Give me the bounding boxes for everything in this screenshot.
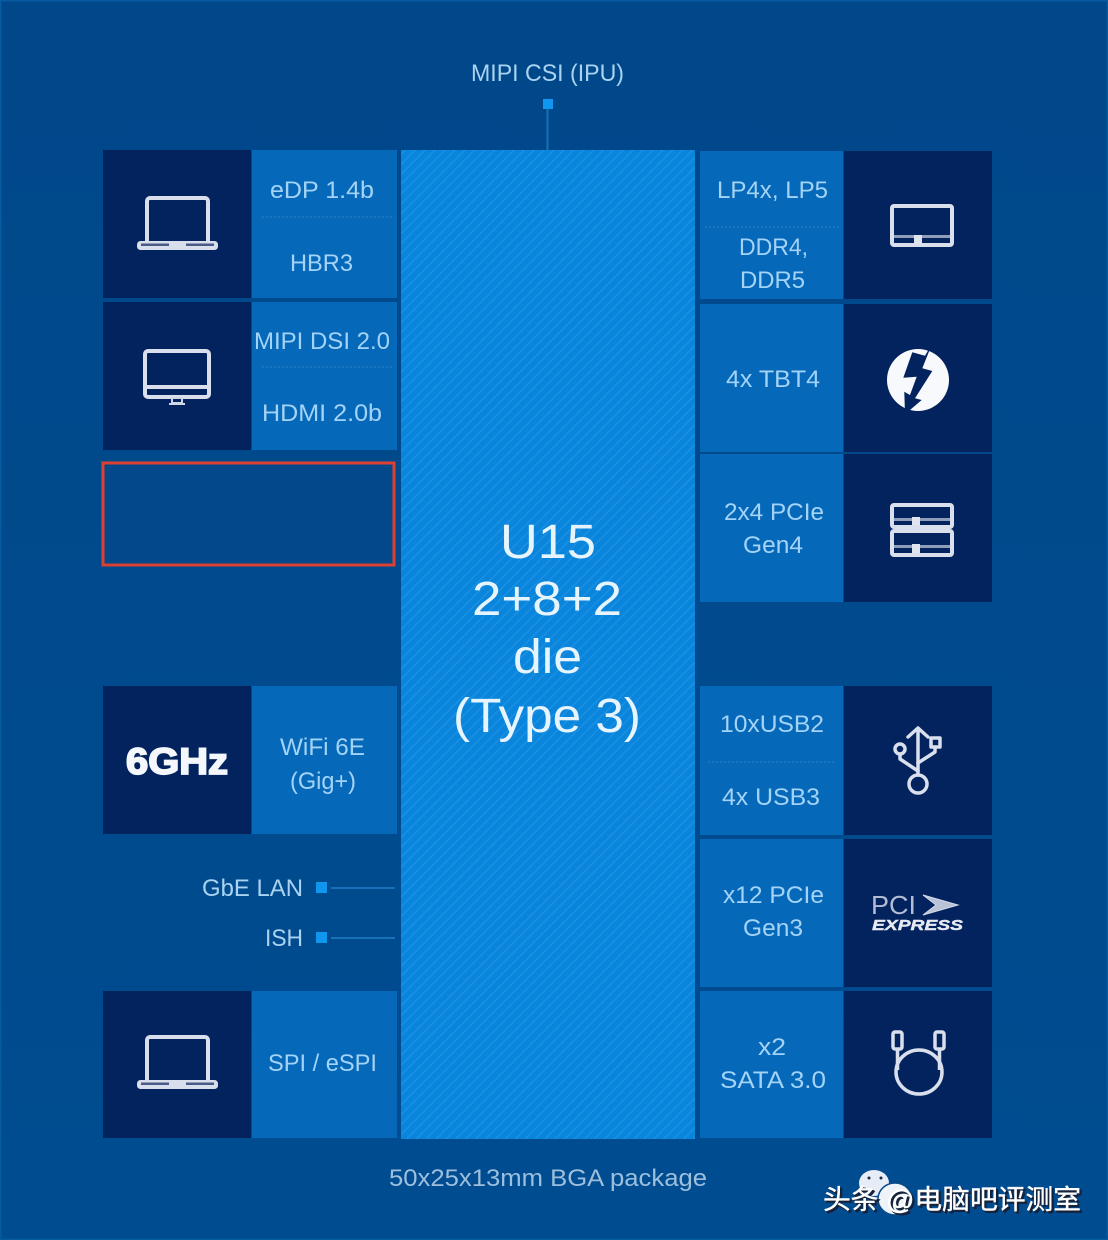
panel: eDP / HBR3 <box>103 150 397 298</box>
icon: PCI Express logo: PCI <box>871 890 916 920</box>
label: GbE LAN connector <box>202 875 395 902</box>
panel: memory: DDR4, <box>739 234 808 261</box>
panel: PCIe Gen4: Gen4 <box>743 532 803 559</box>
redaction box <box>103 463 394 565</box>
icon: monitor <box>145 351 209 405</box>
watermark <box>823 1170 1083 1217</box>
panel: MIPI DSI / HDMI: HDMI 2.0b <box>262 400 382 427</box>
panel: PCIe Gen3: Gen3 <box>743 915 803 942</box>
watermark: 头条 @电脑吧评测室 <box>823 1185 1081 1215</box>
icon: PCI Express logo: EXPRESS <box>872 917 963 934</box>
label: MIPI CSI (IPU) <box>471 60 624 150</box>
panel: SATA <box>700 991 992 1138</box>
die title <box>453 516 641 743</box>
panel: MIPI DSI / HDMI: MIPI DSI 2.0 <box>254 328 390 355</box>
icon: chat bubbles <box>859 1170 912 1215</box>
watermark: 头条 @电脑吧评测室 <box>825 1187 1083 1217</box>
panel: PCIe Gen4 <box>700 454 992 602</box>
panel: SATA: SATA 3.0 <box>720 1067 826 1094</box>
panel: PCIe Gen4: 2x4 PCIe <box>724 499 824 526</box>
icon: PCI Express logo <box>871 890 963 934</box>
icon: USB <box>895 728 940 793</box>
die title: 2+8+2 <box>472 573 622 626</box>
icon: laptop <box>137 198 218 250</box>
panel: MIPI DSI / HDMI <box>103 302 397 450</box>
icon: laptop <box>137 1037 218 1089</box>
die title: (Type 3) <box>453 690 641 743</box>
label: ISH connector <box>265 925 395 952</box>
icon: storage drives <box>892 505 952 555</box>
panel: PCIe Gen3: x12 PCIe <box>723 882 824 909</box>
panel: USB: 10xUSB2 <box>720 711 824 738</box>
panel: central die <box>401 150 695 1139</box>
panel: Thunderbolt 4: 4x TBT4 <box>726 366 820 393</box>
icon: cable <box>893 1032 944 1094</box>
panel: USB <box>700 686 992 835</box>
panel: eDP / HBR3: eDP 1.4b <box>270 177 374 204</box>
panel: SATA: x2 <box>758 1034 786 1061</box>
panel: USB: 4x USB3 <box>722 784 820 811</box>
icon: thunderbolt <box>887 343 949 414</box>
icon: memory module <box>892 206 952 245</box>
panel: memory: DDR5 <box>740 267 805 294</box>
panel: eDP / HBR3: HBR3 <box>290 250 353 277</box>
panel: Thunderbolt 4 <box>700 304 992 452</box>
icon: 6GHz: 6GHz <box>126 741 228 782</box>
panel: SPI / eSPI <box>103 991 397 1138</box>
label: GbE LAN connector: GbE LAN <box>202 875 303 902</box>
label: MIPI CSI (IPU): MIPI CSI (IPU) <box>471 60 624 87</box>
panel: WiFi 6E <box>103 686 397 834</box>
panel: WiFi 6E: WiFi 6E <box>280 734 365 761</box>
panel: memory <box>700 151 992 299</box>
panel: WiFi 6E: (Gig+) <box>290 768 356 795</box>
panel: SPI / eSPI: SPI / eSPI <box>268 1050 377 1077</box>
die title: U15 <box>500 516 596 569</box>
panel: PCIe Gen3 <box>700 839 992 987</box>
label: ISH connector: ISH <box>265 925 303 952</box>
die title: die <box>513 631 582 684</box>
footer: package size: 50x25x13mm BGA package <box>389 1165 707 1192</box>
panel: memory: LP4x, LP5 <box>717 177 828 204</box>
